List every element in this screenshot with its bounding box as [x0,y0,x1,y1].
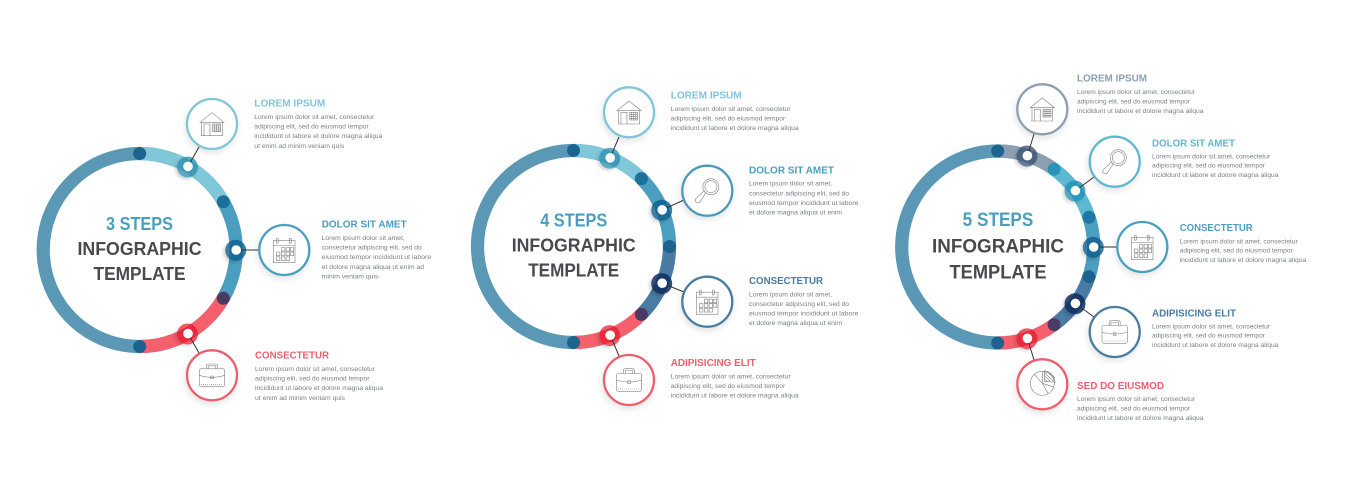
title: 4 steps: TEMPLATE [528,260,619,281]
step 1: lorem ipsum: incididunt ut labore et dolore magna aliqua [254,133,383,140]
step 2: dolor sit amet: Lorem ipsum dolor sit amet, [322,235,405,242]
step 5: sed do eiusmod: adipiscing elit, sed do eiusmod tempor [1077,405,1191,412]
ring: 5 steps [864,113,1132,381]
panel: 4 steps diagram [438,87,859,405]
step 4: adipisicing elit: Lorem ipsum dolor sit amet, consectetur [671,373,791,380]
title: 4 steps [512,210,636,281]
step 2: dolor sit amet: minim veniam quis [322,273,379,280]
panel: 5 steps diagram [864,73,1306,422]
step 1: lorem ipsum: LOREM IPSUM [671,90,742,102]
title: 3 steps [78,213,202,284]
step 3: consectetur: ut enim ad minim veniam quis [255,395,346,402]
step 4: adipisicing elit: incididunt ut labore et dolore magna aliqua [1152,342,1279,349]
step 2: dolor sit amet: consectetur adipiscing elit, sed do [749,190,849,197]
title: 4 steps: 4 STEPS [540,210,607,231]
step 1: lorem ipsum: LOREM IPSUM [1077,73,1147,85]
step 4: adipisicing elit: incididunt ut labore et dolore magna aliqua [671,392,799,400]
step 1: lorem ipsum: adipiscing elit, sed do eiusmod tempor [671,116,786,123]
step 2: dolor sit amet: DOLOR SIT AMET [322,219,407,231]
step 2: dolor sit amet: Lorem ipsum dolor sit amet, [749,181,832,188]
step 3: consectetur: incididunt ut labore et dolore magna aliqua [1180,257,1306,264]
step 3: consectetur: CONSECTETUR [749,275,823,287]
step 4: adipisicing elit: Lorem ipsum dolor sit amet, consectetur [1152,323,1271,330]
step 1: lorem ipsum: adipiscing elit, sed do eiusmod tempor [1077,98,1191,106]
title: 3 steps: TEMPLATE [94,263,186,284]
step 4: adipisicing elit: ADIPISICING ELIT [671,357,756,369]
step 2: dolor sit amet: adipiscing elit, sed do eiusmod tempor [1152,163,1266,170]
step 3: consectetur [1083,222,1306,272]
step 1: lorem ipsum: incididunt ut labore et dolore magna aliqua [671,125,799,132]
step 1: lorem ipsum: Lorem ipsum dolor sit amet, consectetur [671,106,791,113]
step 3: consectetur: Lorem ipsum dolor sit amet, consectetur [255,366,376,373]
step 1: lorem ipsum: ut enim ad minim veniam quis [254,143,345,150]
step 3: consectetur: CONSECTETUR [1180,222,1253,234]
step 4: adipisicing elit [1064,293,1279,357]
step 4: adipisicing elit: adipiscing elit, sed do eiusmod tempor [1152,333,1266,340]
step 3: consectetur: Lorem ipsum dolor sit amet, consectetur [1180,238,1298,245]
step 2: dolor sit amet: incididunt ut labore et dolore magna aliqua [1152,172,1279,179]
step 3: consectetur [651,273,859,327]
step 5: sed do eiusmod [1016,328,1204,422]
step 3: consectetur: incididunt ut labore et dolore magna aliqua [255,385,383,392]
title: 3 steps: 3 STEPS [106,213,173,234]
step 2: dolor sit amet: et dolore magna aliqua ut enim [749,210,842,216]
step 1: lorem ipsum [1016,73,1204,166]
step 1: lorem ipsum: Lorem ipsum dolor sit amet, consectetur [1077,89,1196,96]
step 1: lorem ipsum: LOREM IPSUM [254,98,326,110]
step 1: lorem ipsum: Lorem ipsum dolor sit amet, consectetur [254,114,375,121]
title: 5 steps [932,209,1064,283]
step 5: sed do eiusmod: incididunt ut labore et dolore magna aliqua [1077,415,1204,422]
step 3: consectetur: CONSECTETUR [255,349,329,361]
step 3: consectetur [177,324,383,402]
step 1: lorem ipsum: adipiscing elit, sed do eiusmod tempor [254,124,370,131]
step 2: dolor sit amet: Lorem ipsum dolor sit amet, consectetur [1152,153,1271,160]
step 3: consectetur: adipiscing elit, sed do eiusmod tempor [255,376,370,383]
ring: 4 steps [438,111,709,382]
step 2: dolor sit amet [225,219,431,280]
step 2: dolor sit amet [651,164,859,221]
step 2: dolor sit amet [1064,137,1279,202]
step 2: dolor sit amet: et dolore magna aliqua ut enim ad [322,264,424,271]
ring: 3 steps [8,118,272,382]
title: 5 steps: TEMPLATE [950,261,1046,283]
step 2: dolor sit amet: eiusmod tempor incididunt ut labore [322,254,431,261]
title: 3 steps: INFOGRAPHIC [78,238,202,259]
title: 5 steps: 5 STEPS [963,209,1033,231]
step 2: dolor sit amet: DOLOR SIT AMET [1152,137,1236,149]
step 4: adipisicing elit [599,325,799,405]
step 3: consectetur: et dolore magna aliqua ut enim [749,320,842,327]
step 3: consectetur: Lorem ipsum dolor sit amet, [749,291,832,298]
title: 4 steps: INFOGRAPHIC [512,235,636,256]
step 2: dolor sit amet: eiusmod tempor incididunt ut labore [749,200,859,207]
step 5: sed do eiusmod: SED DO EIUSMOD [1077,380,1164,392]
step 2: dolor sit amet: consectetur adipiscing elit, sed do [322,245,422,252]
step 5: sed do eiusmod: Lorem ipsum dolor sit amet, consectetur [1077,396,1196,403]
step 4: adipisicing elit: adipiscing elit, sed do eiusmod tempor [671,383,786,390]
step 1: lorem ipsum [599,87,799,169]
step 3: consectetur: adipiscing elit, sed do eiusmod tempor [1180,248,1293,255]
title: 5 steps: INFOGRAPHIC [932,235,1064,257]
panel: 3 steps diagram [8,98,431,402]
step 3: consectetur: consectetur adipiscing elit, sed do [749,301,849,308]
step 1: lorem ipsum [177,98,383,178]
step 3: consectetur: eiusmod tempor incididunt ut labore [749,310,859,318]
step 4: adipisicing elit: ADIPISICING ELIT [1152,307,1237,319]
step 2: dolor sit amet: DOLOR SIT AMET [749,164,835,176]
step 1: lorem ipsum: incididunt ut labore et dolore magna aliqua [1077,108,1204,115]
